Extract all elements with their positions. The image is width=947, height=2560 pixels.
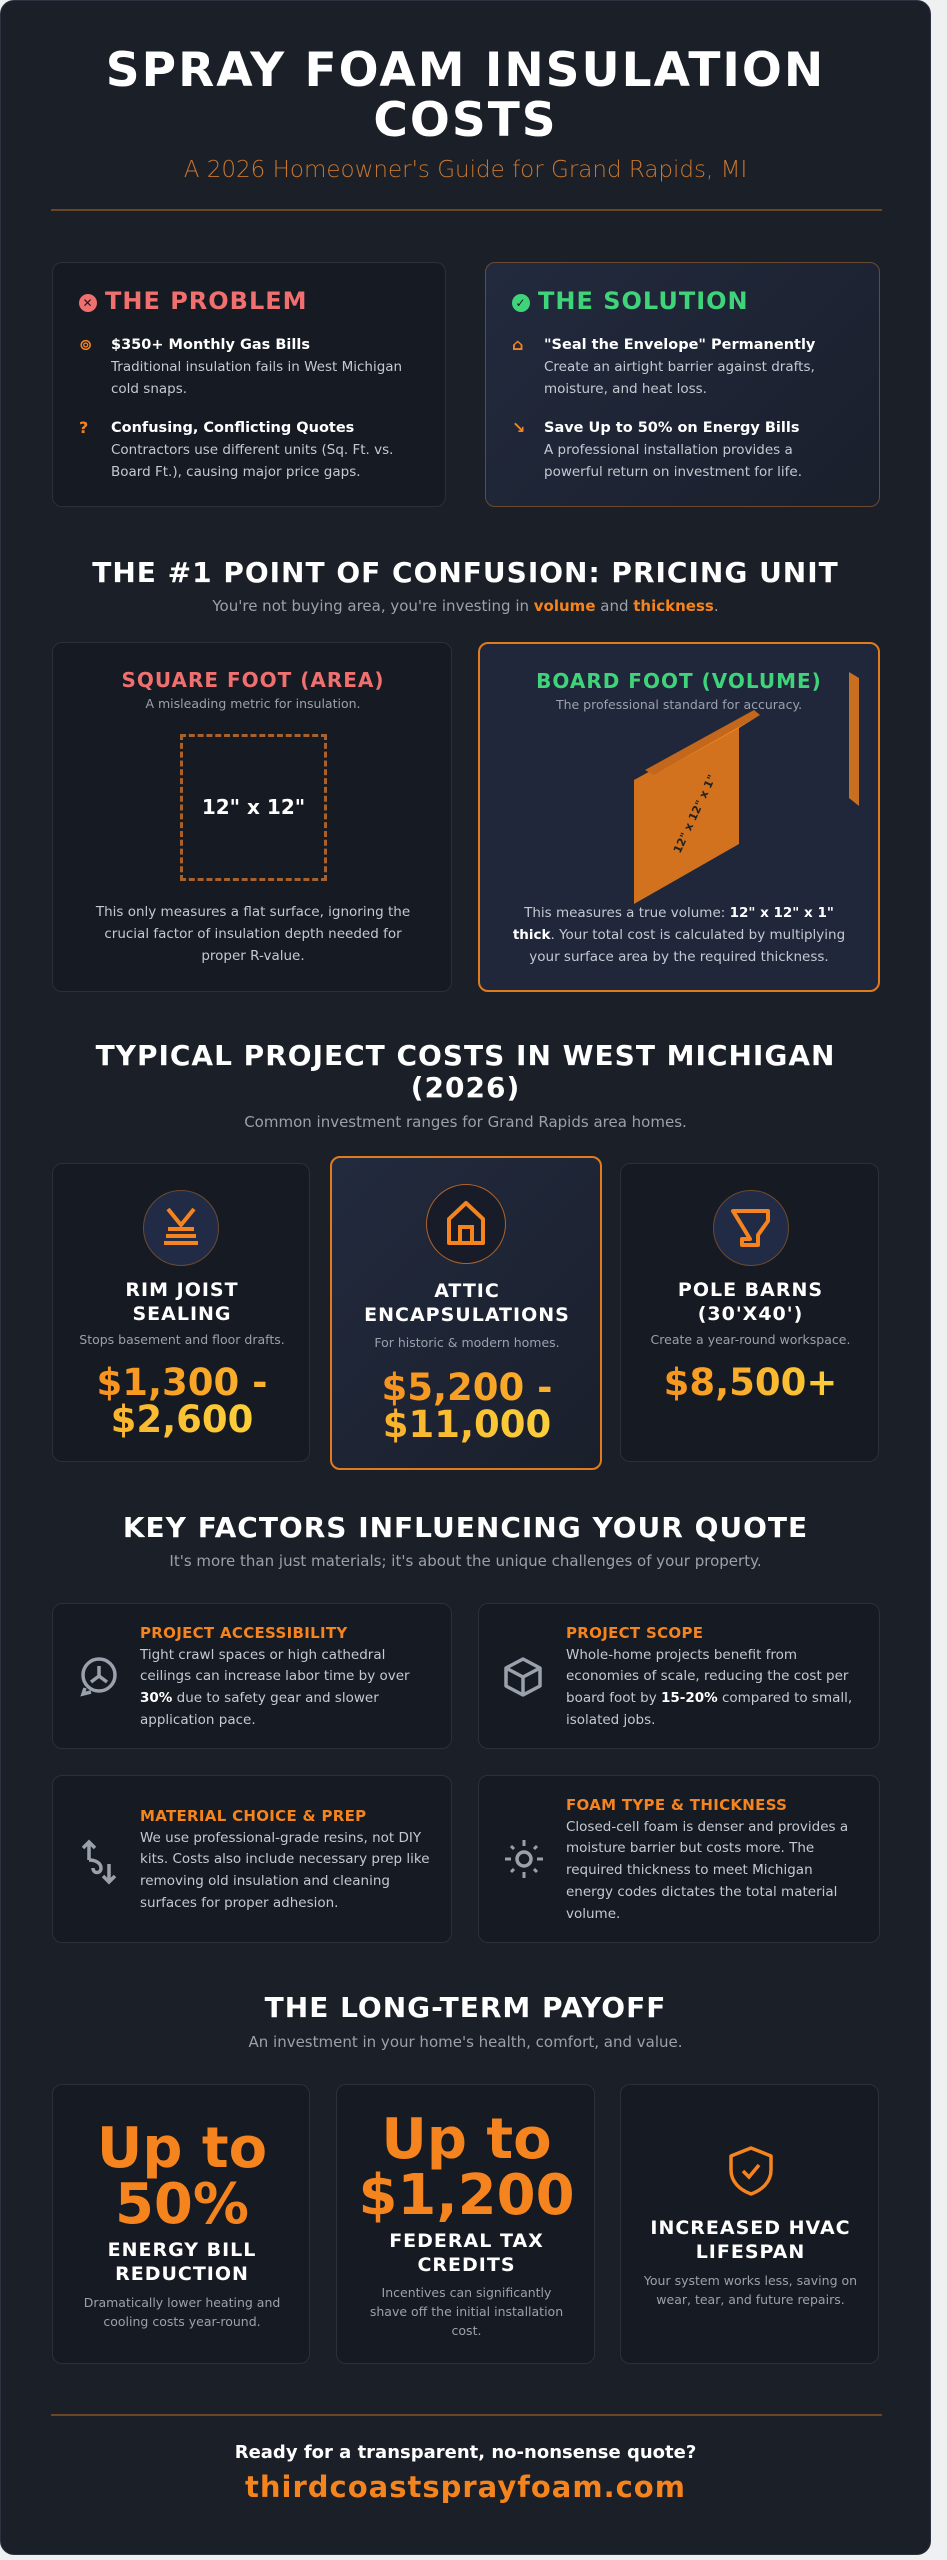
- text: foam type: FOAM TYPE & THICKNESS: [566, 1796, 787, 1814]
- title: hvac: LIFESPAN: [696, 2241, 805, 2263]
- panel: rim joist: [52, 1163, 310, 1462]
- item: quotes: ?: [79, 418, 88, 437]
- heading: key factors: KEY FACTORS INFLUENCING YOUR QUOTE: [123, 1511, 808, 1544]
- title: attic: ENCAPSULATIONS: [364, 1304, 570, 1326]
- title: energy bill: REDUCTION: [115, 2263, 249, 2285]
- heading: payoff: THE LONG-TERM PAYOFF: [265, 1991, 666, 2024]
- title: tax credits: CREDITS: [417, 2254, 516, 2276]
- heading: project costs: [96, 1039, 835, 1104]
- panel: square foot: A misleading metric for insulation.: [145, 696, 360, 711]
- diagram: board foot block: [634, 672, 859, 904]
- heading: pricing unit: THE #1 POINT OF CONFUSION: PRICING UNIT: [92, 556, 839, 589]
- heading: project costs: TYPICAL PROJECT COSTS IN WEST MICHIGAN: [96, 1039, 835, 1072]
- heading: project costs: (2026): [411, 1071, 520, 1104]
- icon: shield: [729, 2146, 773, 2196]
- item: gas bills: Traditional insulation fails in West Michigan cold snaps.: [111, 359, 402, 397]
- panel: the problem: [52, 262, 446, 507]
- stat: 50%: 50%: [115, 2172, 249, 2237]
- item: save: Save Up to 50% on Energy Bills: [544, 420, 799, 436]
- item: quotes: [79, 418, 393, 480]
- subheading costs: Common investment ranges for Grand Rapids area homes.: [244, 1113, 687, 1131]
- stat: 50%: Up to: [97, 2116, 267, 2181]
- subheading pricing: You're not buying area, you're investing in volume and thickness.: [212, 597, 719, 615]
- panel: board foot: [478, 642, 880, 992]
- title: attic: [364, 1280, 570, 1326]
- title: rim joist: RIM JOIST: [125, 1279, 239, 1301]
- title: SPRAY FOAM INSULATION: [106, 43, 825, 98]
- item: gas bills: ⊚: [79, 335, 92, 354]
- panel: energy bill: Dramatically lower heating and cooling costs year-round.: [84, 2295, 280, 2329]
- stat: $1,200: $1,200: [358, 2163, 575, 2228]
- text: area explanation: This only measures a flat surface, ignoring the crucial factor of insulation depth needed for proper R-value.: [96, 904, 410, 964]
- heading: square foot: SQUARE FOOT (AREA): [121, 668, 385, 692]
- title: energy bill: ENERGY BILL: [108, 2239, 256, 2261]
- icon: cube: [504, 1657, 542, 1697]
- text: accessibility: PROJECT ACCESSIBILITY: [140, 1624, 348, 1642]
- title: rim joist: [125, 1279, 239, 1325]
- panel: hvac: [620, 2084, 879, 2364]
- icon: rim joist: [143, 1190, 219, 1266]
- footer: call to action: Ready for a transparent, no-nonsense quote?: [235, 2442, 696, 2463]
- item: save: [512, 418, 802, 480]
- panel: accessibility: [52, 1603, 452, 1749]
- text: accessibility: Tight crawl spaces or high cathedral ceilings can increase labor time by over 30% due to safety gear and slower application pace.: [140, 1647, 410, 1728]
- footer: website: thirdcoastsprayfoam.com: [245, 2470, 686, 2504]
- text: volume explanation: This measures a true volume: 12" x 12" x 1" thick. Your total cost is calculated by multiplying your surface area by the required thickness.: [513, 905, 845, 965]
- item: gas bills: [79, 335, 402, 397]
- heading: the problem: ✕: [82, 296, 94, 310]
- text: material: We use professional-grade resins, not DIY kits. Costs also include necessary prep like removing old insulation and cleaning surfaces for proper adhesion.: [140, 1830, 430, 1911]
- item: seal envelope: Create an airtight barrier against drafts, moisture, and heat loss.: [544, 359, 815, 397]
- item: gas bills: $350+ Monthly Gas Bills: [111, 337, 310, 353]
- panel: scope: [478, 1603, 880, 1749]
- heading: the solution: ✓: [515, 296, 527, 310]
- item: save: A professional installation provides a powerful return on investment for life.: [544, 442, 802, 480]
- item: save: ↘: [512, 418, 525, 437]
- stat: $1,200: [358, 2107, 575, 2228]
- price: attic: $11,000: [383, 1403, 551, 1446]
- title: COSTS: [373, 93, 558, 148]
- panel: tax credits: Incentives can significantly shave off the initial installation cost.: [370, 2285, 563, 2338]
- panel: tax credits: [336, 2084, 595, 2364]
- icon: sun: [505, 1840, 543, 1878]
- panel: pole barns: [620, 1163, 879, 1462]
- item: seal envelope: "Seal the Envelope" Permanently: [544, 337, 815, 353]
- title: [106, 43, 825, 148]
- price: rim joist: [96, 1361, 268, 1441]
- title: tax credits: FEDERAL TAX: [389, 2230, 544, 2252]
- diagram: dashed square: 12" x 12": [202, 795, 305, 819]
- title: tax credits: [389, 2230, 544, 2276]
- title: pole barns: [678, 1279, 823, 1325]
- title: hvac: INCREASED HVAC: [650, 2217, 851, 2239]
- diagram: dashed square: [180, 734, 327, 881]
- icon: barn: [713, 1190, 789, 1266]
- panel: rim joist: Stops basement and floor drafts.: [79, 1332, 285, 1347]
- item: seal envelope: ⌂: [512, 335, 523, 354]
- title: rim joist: SEALING: [132, 1303, 232, 1325]
- heading: the solution: THE SOLUTION: [538, 287, 749, 315]
- panel: attic: [330, 1156, 602, 1470]
- title: pole barns: POLE BARNS: [678, 1279, 823, 1301]
- stat: 50%: [97, 2116, 267, 2237]
- subheading payoff: An investment in your home's health, comfort, and value.: [248, 2033, 682, 2051]
- stat: $1,200: Up to: [381, 2107, 552, 2172]
- panel: the solution: [485, 262, 880, 507]
- price: attic: [381, 1366, 553, 1446]
- panel: attic: For historic & modern homes.: [374, 1335, 560, 1350]
- icon: house: [426, 1184, 506, 1264]
- price: rim joist: $2,600: [111, 1398, 253, 1441]
- panel: board foot: The professional standard for accuracy.: [556, 697, 802, 712]
- text: scope: PROJECT SCOPE: [566, 1624, 703, 1642]
- panel: foam type: [478, 1775, 880, 1943]
- title: hvac: [650, 2217, 851, 2263]
- heading: the problem: THE PROBLEM: [105, 287, 308, 315]
- item: seal envelope: [512, 335, 815, 397]
- price: pole barns: $8,500+: [664, 1361, 837, 1404]
- panel: material: [52, 1775, 452, 1943]
- subheading factors: It's more than just materials; it's about the unique challenges of your property.: [169, 1552, 762, 1570]
- title: energy bill: [108, 2239, 256, 2285]
- diagram: board foot block: 12" x 12" x 1": [671, 773, 719, 855]
- text: scope: Whole-home projects benefit from economies of scale, reducing the cost per board foot by 15-20% compared to small, isolated jobs.: [566, 1647, 852, 1728]
- panel: square foot: [52, 642, 452, 992]
- icon: arrows: [82, 1840, 116, 1884]
- text: foam type: Closed-cell foam is denser and provides a moisture barrier but costs more. The required thickness to meet Michigan energy codes dictates the total material volume.: [566, 1819, 848, 1922]
- icon: accessibility: [80, 1657, 117, 1696]
- panel: energy bill: [52, 2084, 310, 2364]
- subtitle: A 2026 Homeowner's Guide for Grand Rapids, MI: [184, 157, 747, 183]
- price: rim joist: $1,300 -: [96, 1361, 268, 1404]
- text: material: MATERIAL CHOICE & PREP: [140, 1807, 366, 1825]
- item: quotes: Confusing, Conflicting Quotes: [111, 420, 354, 436]
- panel: pole barns: Create a year-round workspace.: [651, 1332, 850, 1347]
- price: attic: $5,200 -: [381, 1366, 553, 1409]
- heading: board foot: BOARD FOOT (VOLUME): [536, 669, 822, 693]
- item: quotes: Contractors use different units (Sq. Ft. vs. Board Ft.), causing major price gaps.: [111, 442, 393, 480]
- panel: hvac: Your system works less, saving on wear, tear, and future repairs.: [644, 2273, 857, 2307]
- title: pole barns: (30'X40'): [698, 1303, 803, 1325]
- title: attic: ATTIC: [434, 1280, 500, 1302]
